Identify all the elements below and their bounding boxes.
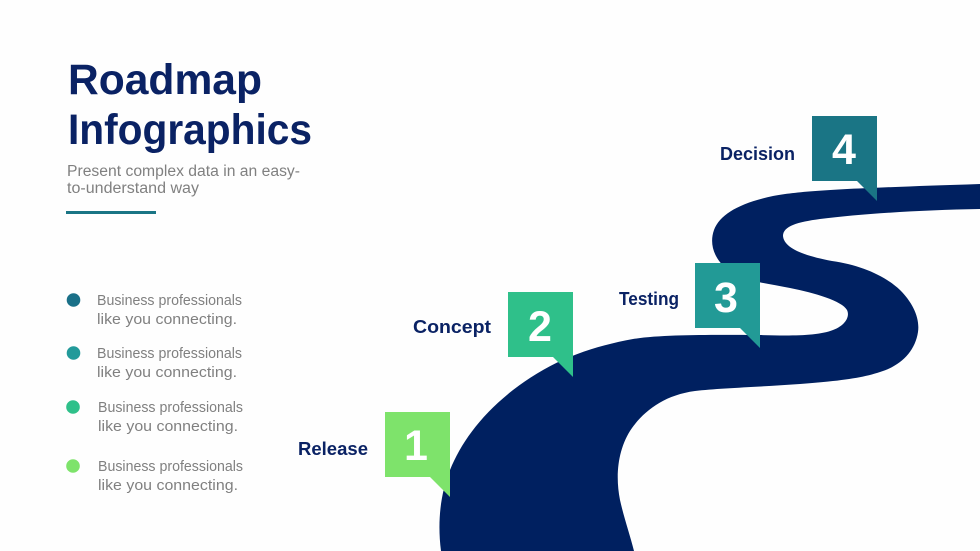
- winding road: [439, 184, 980, 551]
- title: Infographics: [68, 106, 312, 154]
- step 1: Release: 1: [404, 422, 428, 470]
- bullet 4: [66, 458, 243, 494]
- bullet 1: [67, 292, 242, 328]
- bullet 2: [67, 345, 242, 381]
- step 4: Decision: [720, 116, 877, 201]
- step 2: Concept: [413, 292, 573, 377]
- bullet 3: Business professionals: [98, 399, 243, 416]
- bullet 4: Business professionals: [98, 458, 243, 475]
- bullet 3: like you connecting.: [98, 418, 238, 435]
- bullet 4: like you connecting.: [98, 477, 238, 494]
- title underline: [66, 211, 156, 214]
- bullet 1: like you connecting.: [97, 311, 237, 328]
- bullet 3: [66, 399, 243, 435]
- bullet list: [66, 292, 243, 494]
- title: [68, 56, 312, 154]
- bullet 2: Business professionals: [97, 345, 242, 362]
- title: Roadmap: [68, 56, 262, 104]
- bullet 1: Business professionals: [97, 292, 242, 309]
- step 1: Release: [298, 412, 450, 497]
- step 3: Testing: Testing: [619, 289, 679, 309]
- step 3: Testing: 3: [714, 274, 738, 322]
- bullet 2: like you connecting.: [97, 364, 237, 381]
- step 2: Concept: 2: [528, 303, 552, 351]
- subtitle: [67, 163, 300, 197]
- subtitle: to-understand way: [67, 180, 199, 197]
- step 2: Concept: Concept: [413, 317, 491, 337]
- step 3: Testing: [619, 263, 760, 348]
- step 4: Decision: Decision: [720, 144, 795, 164]
- step 1: Release: Release: [298, 439, 368, 459]
- subtitle: Present complex data in an easy-: [67, 163, 300, 180]
- step 4: Decision: 4: [832, 126, 856, 174]
